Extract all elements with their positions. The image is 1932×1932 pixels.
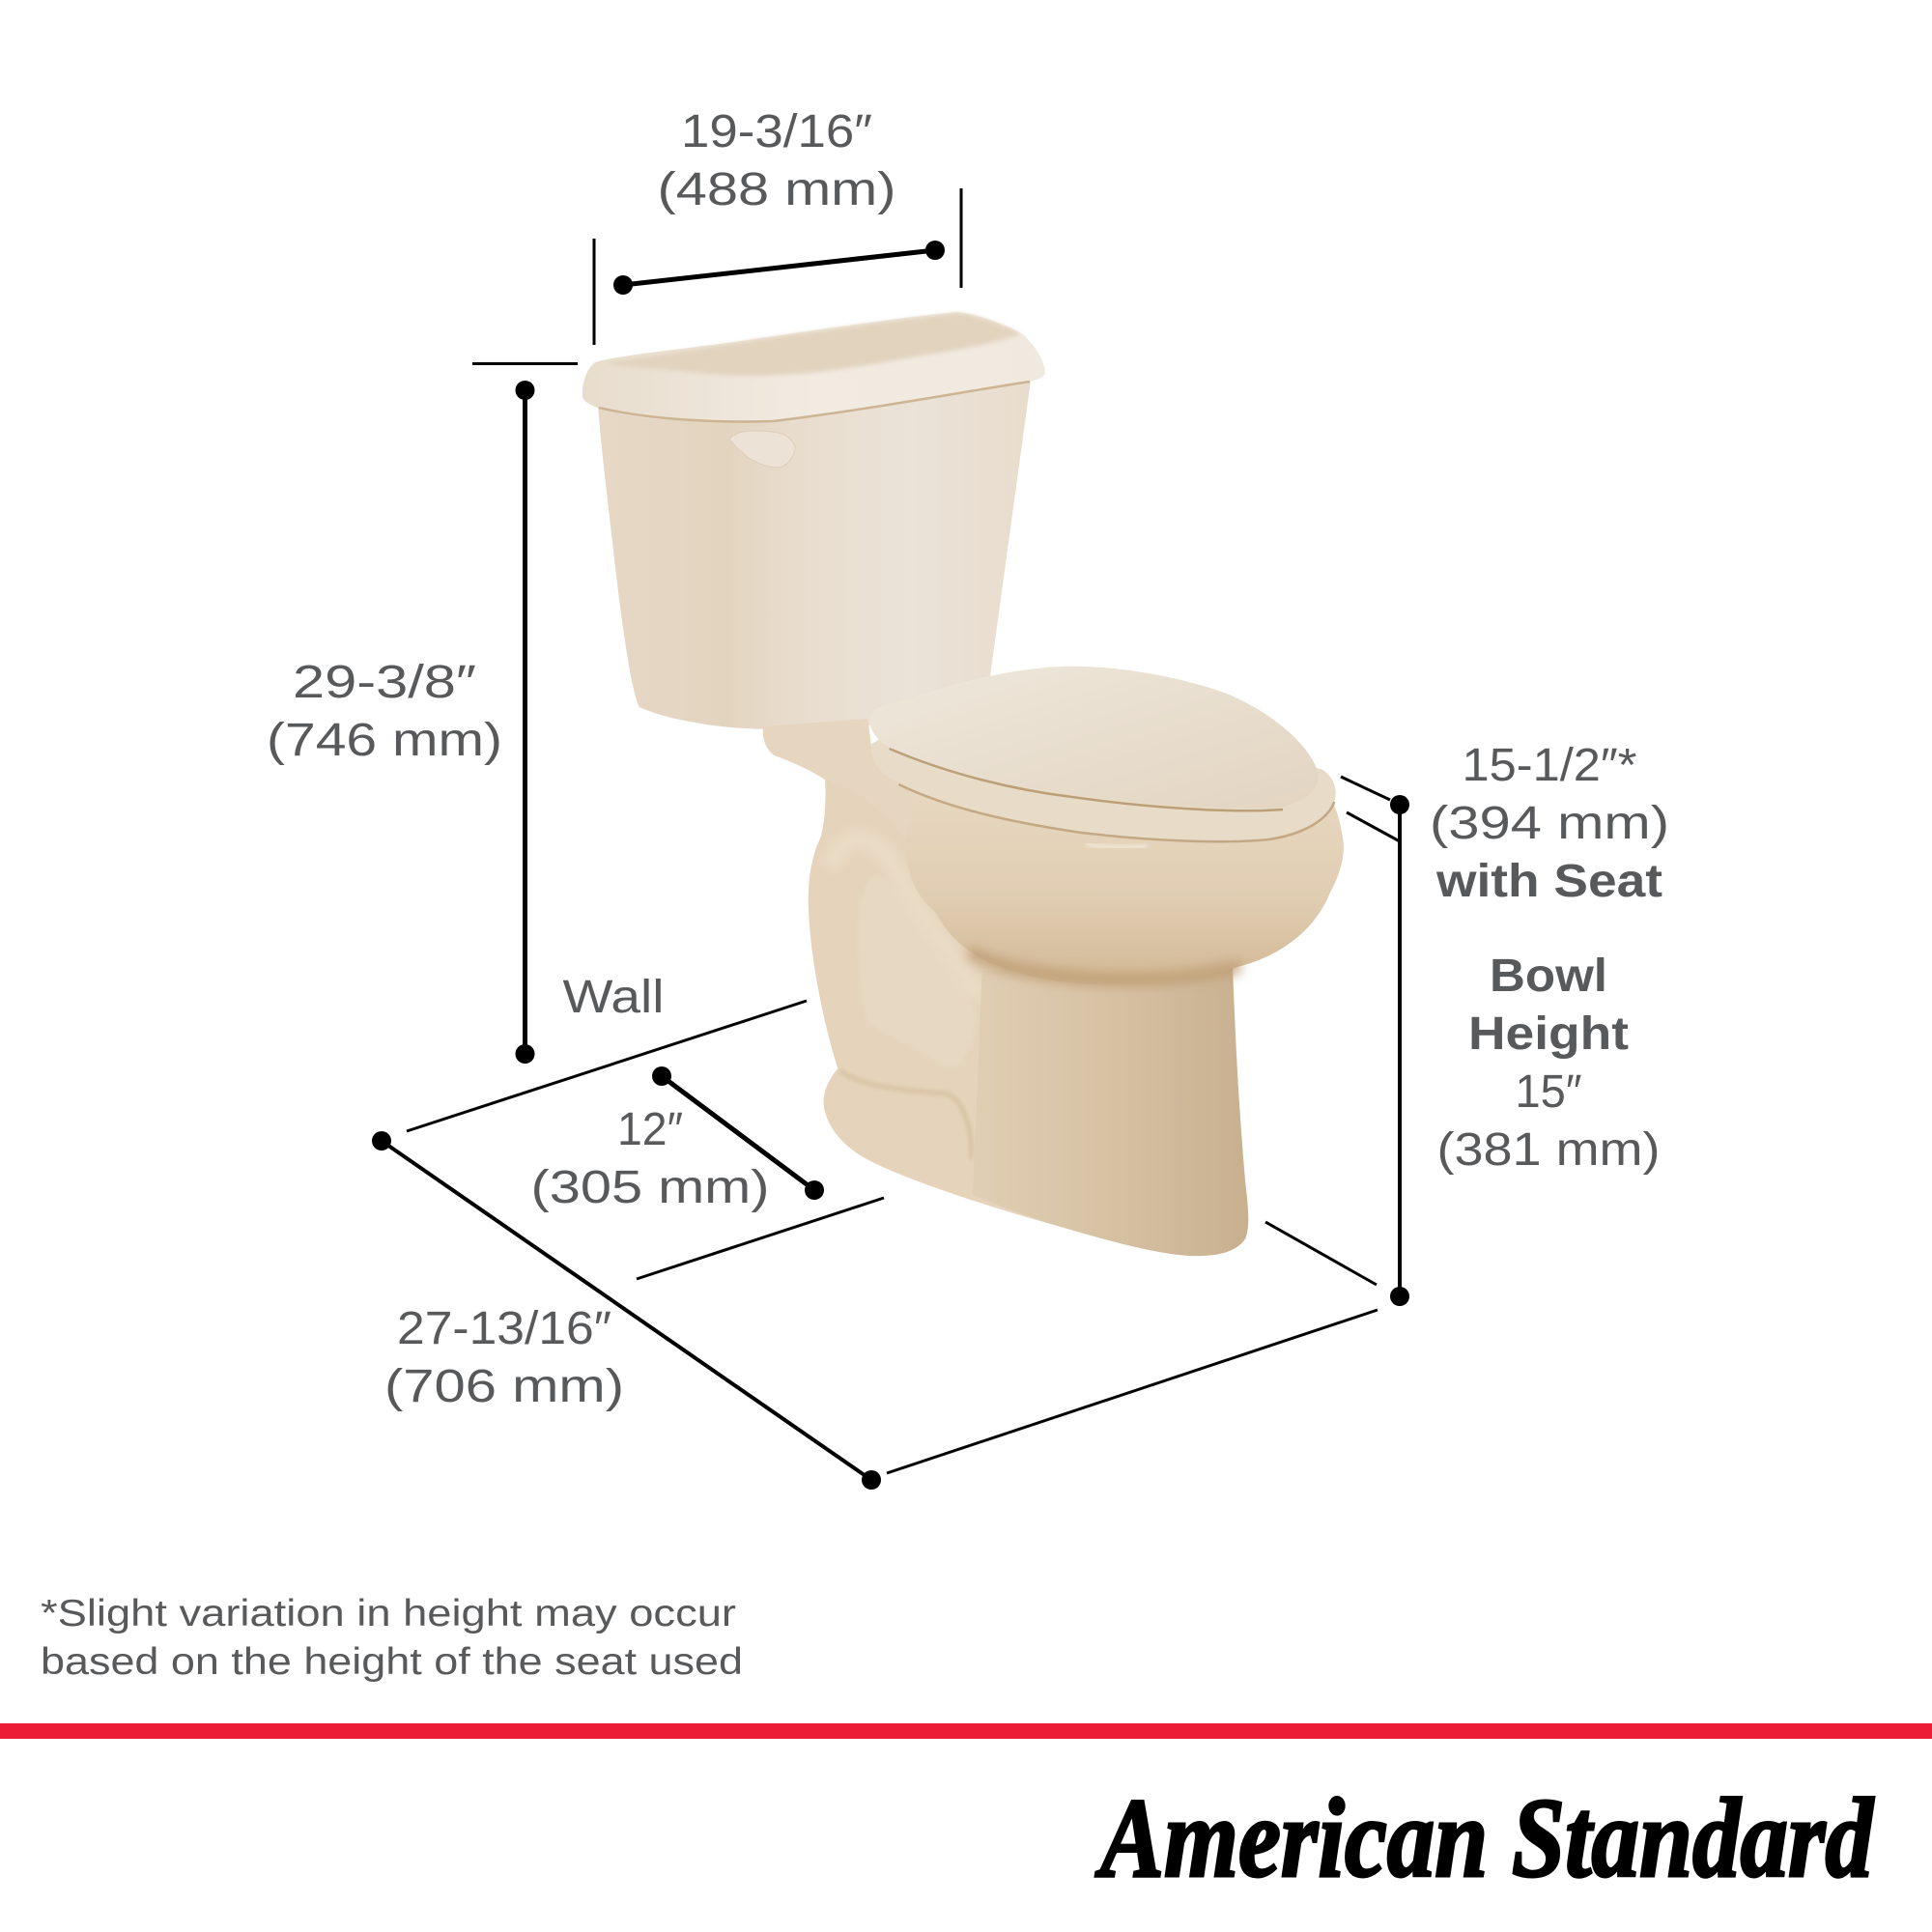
wall line upper [407,1001,807,1131]
footnote [41,1593,743,1683]
red divider bar [0,1723,1932,1739]
bowl shadow [969,952,1240,980]
tank body [598,381,1031,729]
label: 12 in: 12″ [617,1104,683,1155]
footnote: *Slight variation in height may occur [41,1593,736,1634]
label: 15-1/2 with seat: (394 mm) [1430,798,1669,849]
tank lid [582,312,1045,422]
label: 19-3/16: (488 mm) [657,164,896,215]
label: bowl height 15: (381 mm) [1437,1124,1660,1176]
label: 29-3/8: 29-3/8″ [293,657,476,708]
seat lid [869,667,1319,809]
inner recess [858,876,977,1068]
pedestal front [973,956,1248,1256]
bowl back and trapway [809,773,1248,1256]
label: 19-3/16: 19-3/16″ [681,106,872,157]
dimension: bowl height [1265,777,1409,1306]
trapway curve highlight [833,838,974,990]
toilet product photo [582,312,1344,1256]
label: 15-1/2 with seat: with Seat [1435,856,1662,907]
lid underside line [890,749,1283,810]
bowl highlight [1086,844,1147,847]
tank lid top [602,313,1021,376]
bowl assembly [763,667,1344,1256]
supply neck [763,719,1081,838]
dimension: depth 27-13/16 [372,1131,881,1490]
label: bowl height 15: Bowl [1490,951,1607,1002]
label: 29-3/8: (746 mm) [267,715,502,766]
seat ring [871,715,1336,840]
foot detail [839,1070,971,1159]
floor line front [887,1310,1378,1473]
seat underside line [898,784,1334,841]
label: 19-3/16 [657,106,896,215]
wall line lower [637,1198,884,1279]
label: bowl height 15: 15″ [1515,1066,1582,1118]
label: 27-13/16: 27-13/16″ [397,1303,611,1354]
label: 27-13/16 [384,1303,624,1412]
dimension: rough-in 12 [652,1066,824,1200]
label: 15-1/2 with seat [1430,740,1669,907]
dimension: tank width 19-3/16 [594,188,961,345]
label: bowl height 15: Height [1468,1009,1629,1060]
bowl [905,773,1344,985]
label: 12 in [531,1104,769,1213]
label: 29-3/8 [267,657,502,766]
tank lid edge [599,382,1030,421]
footnote: based on the height of the seat used [41,1641,743,1683]
label: 15-1/2 with seat: 15-1/2″* [1463,740,1636,791]
label: 27-13/16: (706 mm) [384,1361,624,1412]
label: Wall: Wall [562,972,665,1023]
label: 12 in: (305 mm) [531,1162,769,1213]
label: bowl height 15 [1437,951,1660,1176]
dimension: height 29-3/8 [472,363,578,1064]
flush handle [729,431,795,468]
